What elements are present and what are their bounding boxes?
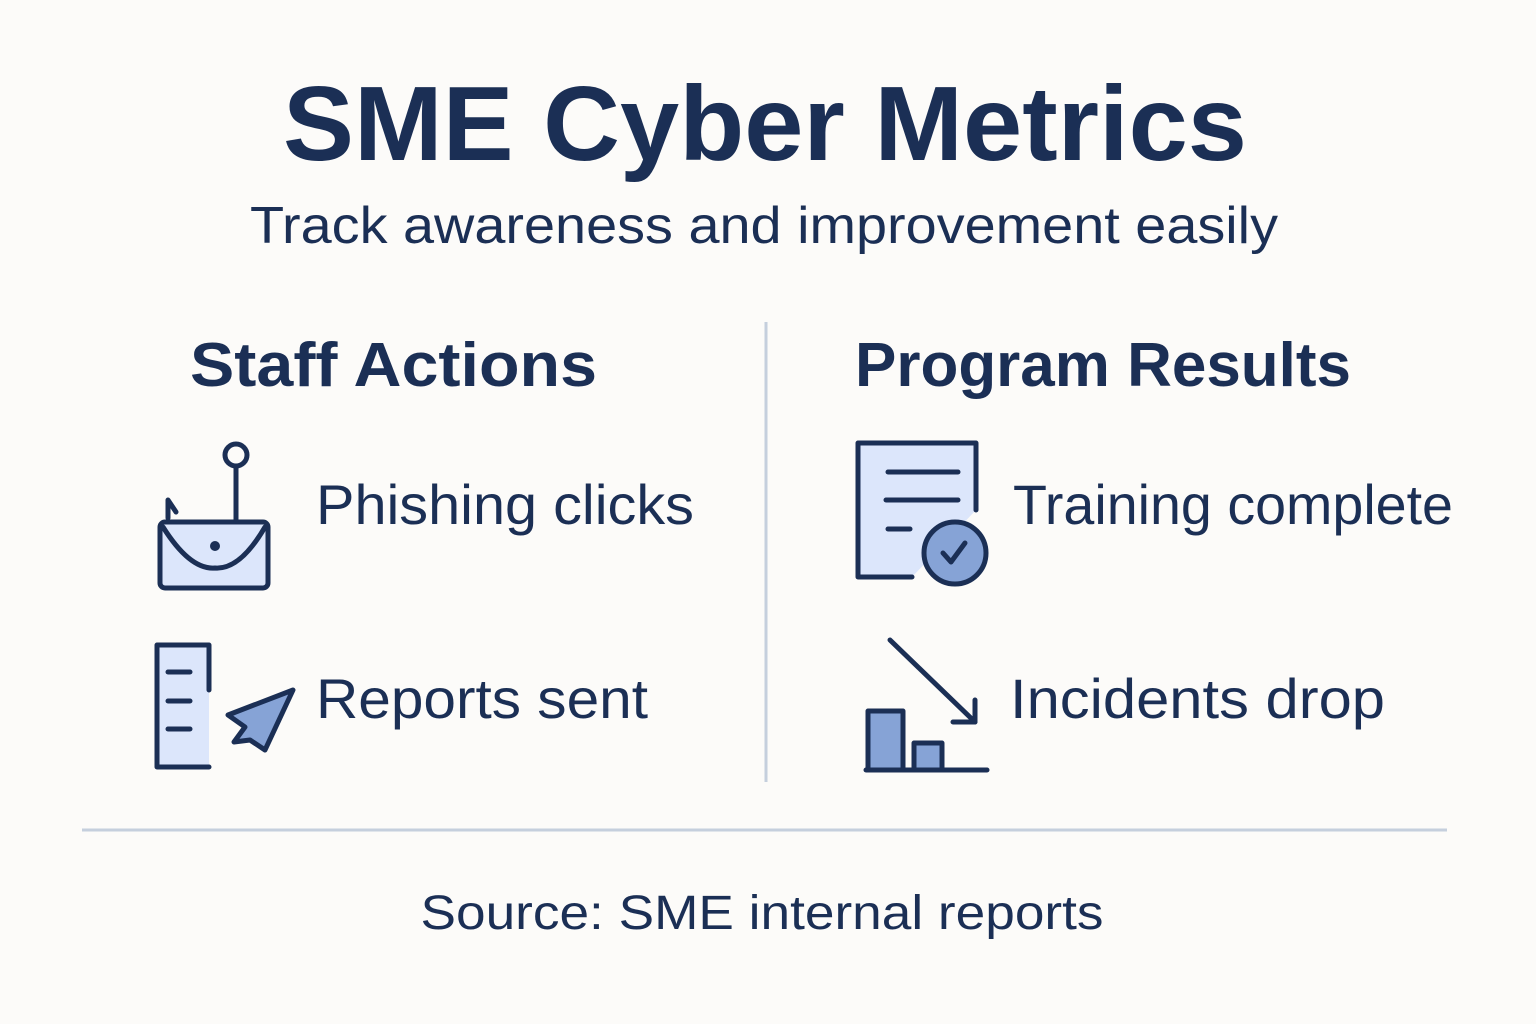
icon: training document with check (858, 443, 986, 584)
subtitle: Track awareness and improvement easily (250, 197, 1278, 255)
heading: Staff Actions: Staff Actions (190, 331, 597, 400)
icon: report with send arrow (157, 645, 293, 767)
icon: incidents drop chart (866, 640, 987, 770)
icon: phishing envelope (160, 444, 268, 588)
label: Reports sent: Reports sent (316, 667, 648, 730)
label: Incidents drop: Incidents drop (1010, 667, 1385, 730)
heading: Program Results: Program Results (855, 331, 1351, 400)
title: SME Cyber Metrics (283, 65, 1247, 183)
label: Training complete: Training complete (1013, 473, 1453, 536)
label: Phishing clicks: Phishing clicks (316, 473, 694, 536)
source note: Source: SME internal reports (420, 887, 1104, 940)
